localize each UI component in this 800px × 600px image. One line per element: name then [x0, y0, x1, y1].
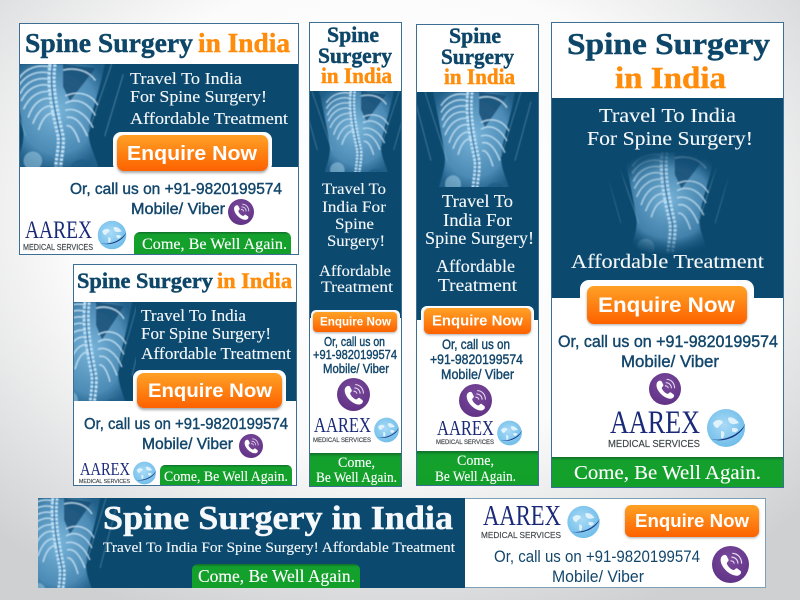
- text: phone: +91-9820199574: [313, 347, 397, 362]
- button: enquire now: [580, 280, 754, 326]
- text: tagline: [425, 191, 534, 295]
- heading: in India: [217, 268, 292, 293]
- logo: aarex: MEDICAL SERVICES: [481, 530, 561, 540]
- text: tagline: [141, 306, 291, 363]
- text: tagline: India For: [443, 210, 512, 230]
- logo: aarex: AAREX: [80, 459, 130, 479]
- heading: in India: [321, 63, 392, 88]
- slogan: Be Well Again.: [435, 469, 516, 485]
- panel image: spine x-ray: [552, 98, 783, 298]
- slogan: Come,: [457, 453, 494, 469]
- text: phone: Or, call us on +91-9820199574: [558, 333, 778, 351]
- slogan: Come, Be Well Again.: [198, 566, 355, 586]
- text: phone: Mobile/ Viber: [323, 361, 390, 376]
- logo: aarex: AAREX: [610, 405, 700, 441]
- text: tagline: Travel To India: [130, 69, 242, 88]
- heading: Spine: [449, 23, 501, 48]
- icon: viber: [239, 434, 263, 458]
- text: phone: [430, 337, 523, 382]
- panel image: spine x-ray: [0, 498, 465, 600]
- text: tagline: Travel To India For Spine Surgery! Affordable Treatment: [103, 540, 455, 556]
- text: tagline: For Spine Surgery!: [141, 324, 271, 343]
- heading: [441, 23, 515, 89]
- icon: viber: [228, 199, 254, 225]
- slogan: [552, 457, 783, 487]
- text: tagline: Treatment: [438, 275, 517, 295]
- slogan: Come, Be Well Again.: [142, 236, 287, 253]
- slogan: [310, 453, 401, 486]
- logo: aarex: MEDICAL SERVICES: [436, 439, 495, 446]
- text: tagline: Spine: [335, 216, 374, 233]
- panel: banner square large: [0, 24, 298, 254]
- text: tagline: Affordable: [319, 263, 391, 280]
- icon: viber: [337, 378, 370, 411]
- heading: [25, 28, 291, 58]
- text: phone: Mobile/ Viber: [621, 353, 720, 371]
- text: tagline: Treatment: [321, 279, 394, 296]
- heading: Spine: [327, 22, 379, 47]
- logo: aarex: MEDICAL SERVICES: [608, 439, 700, 450]
- panel image: spine x-ray: [415, 92, 538, 320]
- panel: banner tall medium: [415, 23, 538, 486]
- slogan: Be Well Again.: [316, 470, 397, 486]
- logo: aarex: MEDICAL SERVICES: [79, 479, 130, 485]
- panel: banner tall narrow: [303, 22, 408, 486]
- text: phone: Or, call us on: [324, 334, 385, 349]
- text: phone: [494, 547, 700, 586]
- text: tagline: Surgery!: [327, 233, 385, 250]
- slogan: [417, 451, 538, 485]
- slogan: Come,: [338, 455, 375, 471]
- panel: banner square small: [32, 264, 296, 486]
- text: phone: [313, 334, 397, 376]
- panel image: spine x-ray: [0, 64, 298, 170]
- text: tagline: Affordable Treatment: [130, 109, 288, 128]
- panel image: spine x-ray: [303, 91, 408, 318]
- button: enquire now: [625, 505, 759, 538]
- text: tagline: Spine Surgery!: [425, 228, 534, 248]
- text: tagline: Travel To: [442, 191, 513, 211]
- icon: viber: [649, 373, 681, 405]
- heading: [318, 22, 392, 88]
- logo: aarex: [436, 416, 522, 446]
- icon: viber: [459, 384, 492, 417]
- button: enquire now: Enquire Now: [432, 312, 523, 330]
- button: enquire now: [133, 370, 286, 410]
- text: phone: [558, 333, 778, 371]
- button: enquire now: Enquire Now: [320, 316, 391, 328]
- text: phone: Or, call us on +91-9820199574: [494, 547, 700, 566]
- button: enquire now: [421, 306, 534, 336]
- text: phone: Mobile/ Viber: [131, 201, 225, 218]
- heading: in India: [615, 60, 727, 95]
- logo: aarex: [313, 413, 399, 444]
- logo: aarex: MEDICAL SERVICES: [313, 437, 372, 444]
- heading: Surgery: [318, 43, 392, 68]
- panel: banner tall wide: [552, 22, 784, 488]
- text: tagline: Affordable: [436, 256, 515, 276]
- slogan: [134, 232, 291, 254]
- text: phone: [84, 416, 288, 453]
- heading: Surgery: [441, 44, 514, 69]
- text: tagline: Affordable Treatment: [571, 251, 764, 273]
- text: phone: Or, call us on +91-9820199574: [70, 181, 282, 198]
- logo: aarex: [79, 459, 156, 485]
- text: phone: Mobile/ Viber: [142, 436, 233, 453]
- heading: Spine Surgery: [567, 26, 771, 61]
- icon: viber: [712, 546, 749, 583]
- text: tagline: [319, 181, 394, 296]
- logo: aarex: AAREX: [483, 501, 561, 532]
- logo: aarex: [23, 217, 126, 252]
- text: phone: Mobile/ Viber: [552, 567, 644, 586]
- text: tagline: [130, 69, 288, 128]
- text: phone: +91-9820199574: [430, 352, 523, 367]
- text: tagline: Travel To: [322, 181, 386, 198]
- panel image: spine x-ray: [32, 302, 296, 410]
- text: phone: Mobile/ Viber: [441, 367, 514, 382]
- heading: Spine Surgery: [77, 268, 213, 293]
- text: phone: [70, 181, 282, 218]
- heading: [77, 268, 292, 293]
- heading: [567, 26, 771, 95]
- logo: aarex: [481, 501, 600, 540]
- button: enquire now: Enquire Now: [598, 294, 736, 317]
- text: tagline: Travel To India: [599, 105, 736, 127]
- text: phone: Or, call us on +91-9820199574: [84, 416, 288, 433]
- slogan: Come, Be Well Again.: [164, 469, 288, 485]
- button: enquire now: Enquire Now: [127, 143, 257, 165]
- heading: in India: [198, 28, 291, 58]
- button: enquire now: Enquire Now: [148, 380, 273, 402]
- text: phone: Or, call us on: [442, 337, 510, 352]
- button: enquire now: Enquire Now: [635, 511, 750, 531]
- logo: aarex: AAREX: [314, 413, 371, 437]
- logo: aarex: MEDICAL SERVICES: [23, 243, 93, 252]
- text: tagline: India For: [322, 199, 387, 216]
- logo: aarex: AAREX: [25, 217, 92, 244]
- text: tagline: For Spine Surgery!: [130, 87, 267, 106]
- logo: aarex: AAREX: [437, 416, 494, 440]
- text: tagline: Travel To India: [141, 306, 247, 325]
- heading: Spine Surgery: [25, 28, 193, 58]
- button: enquire now: [113, 132, 272, 173]
- logo: aarex: [608, 405, 745, 450]
- heading: in India: [444, 64, 515, 89]
- text: tagline: [571, 105, 764, 273]
- text: tagline: Affordable Treatment: [141, 344, 291, 363]
- panel: banner horizontal: [0, 498, 766, 600]
- heading: Spine Surgery in India: [103, 500, 453, 537]
- text: tagline: For Spine Surgery!: [587, 128, 753, 150]
- button: enquire now: [311, 310, 400, 334]
- slogan: Come, Be Well Again.: [574, 463, 761, 484]
